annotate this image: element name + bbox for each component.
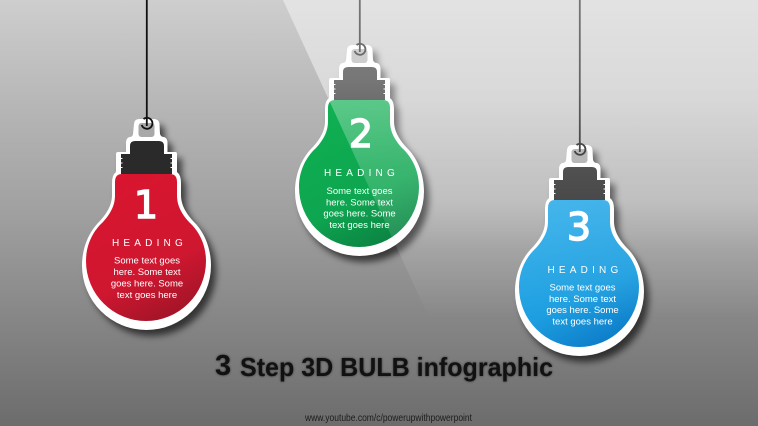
title: 3 <box>215 350 231 382</box>
icon: hook ring <box>142 118 152 129</box>
hanging wire <box>146 0 148 126</box>
body text 1: text goes here <box>117 290 177 301</box>
title: Step 3D BULB infographic <box>240 352 553 382</box>
heading 1: HEADING <box>112 238 187 249</box>
title: 3 <box>215 350 231 382</box>
bulb 3: blue <box>515 0 649 362</box>
bulb 1: red <box>82 0 216 336</box>
body text 2: goes here. Some <box>323 209 396 220</box>
bulb cap <box>554 167 605 200</box>
body text 3: goes here. Some <box>546 305 619 316</box>
heading 3: HEADING <box>548 265 622 276</box>
heading 2: HEADING <box>324 168 399 179</box>
background light wedge <box>283 0 758 320</box>
body text 1: here. Some text <box>113 267 181 278</box>
body text 2: text goes here <box>329 220 390 231</box>
body text 3: here. Some text <box>549 294 616 305</box>
hanging wire <box>579 0 581 152</box>
bulb cap <box>121 141 172 174</box>
icon: hook ring <box>575 144 585 155</box>
icon: hook ring <box>355 44 365 55</box>
glossy light wedge <box>283 0 758 320</box>
body text 2: here. Some text <box>326 197 393 208</box>
body text 3: Some text goes <box>549 282 616 294</box>
bulb cap <box>334 67 385 100</box>
body text 1: Some text goes <box>114 256 180 266</box>
hanging wire <box>359 0 361 52</box>
number 1: 1 <box>134 183 158 227</box>
number 2: 2 <box>349 112 373 156</box>
body text 2: Some text goes <box>326 186 393 197</box>
body text 3: text goes here <box>552 316 613 327</box>
website url: www.youtube.com/c/powerupwithpowerpoint <box>304 412 472 424</box>
number 3: 3 <box>567 205 591 249</box>
body text 1: goes here. Some <box>111 278 183 290</box>
bulb 2: green <box>295 0 429 262</box>
title: Step 3D BULB infographic <box>240 352 553 382</box>
